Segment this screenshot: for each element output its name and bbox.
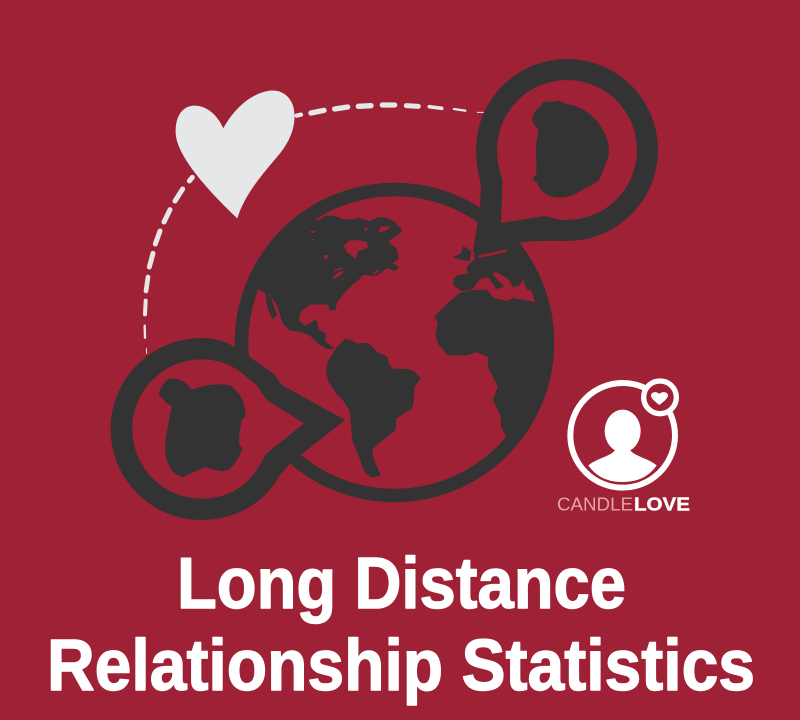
pin outline (473, 59, 658, 252)
wordmark: LOVE: LOVE (634, 494, 690, 514)
silhouette: top face (532, 101, 609, 197)
pin: bottom left (111, 338, 345, 520)
notification badge (644, 381, 676, 414)
pin interior (497, 80, 637, 223)
person head (605, 410, 641, 452)
Africa (435, 290, 552, 437)
Europe (454, 244, 538, 302)
South America (327, 339, 420, 477)
dashed flight path (145, 105, 483, 353)
British Isles (454, 247, 471, 261)
icon: heart (176, 90, 295, 218)
pin: top right (473, 59, 658, 258)
logo icon (570, 381, 676, 488)
person shoulders (588, 450, 657, 482)
streak over Europe (477, 249, 508, 258)
pin outline (111, 338, 345, 520)
title line 1: Long Distance (177, 544, 626, 624)
pin interior (132, 359, 304, 499)
silhouette: bottom face (158, 379, 246, 477)
continents (253, 216, 552, 477)
logo: CandleLove (557, 381, 690, 514)
globe ring (242, 190, 548, 496)
title (47, 544, 755, 706)
Baja California (266, 294, 277, 318)
wordmark: CANDLE: CANDLE (557, 494, 633, 514)
logo wordmark (557, 494, 690, 514)
North America (253, 216, 402, 348)
logo ring (570, 383, 675, 488)
globe (242, 190, 552, 496)
badge heart (651, 392, 668, 405)
title line 2: Relationship Statistics (47, 626, 755, 706)
